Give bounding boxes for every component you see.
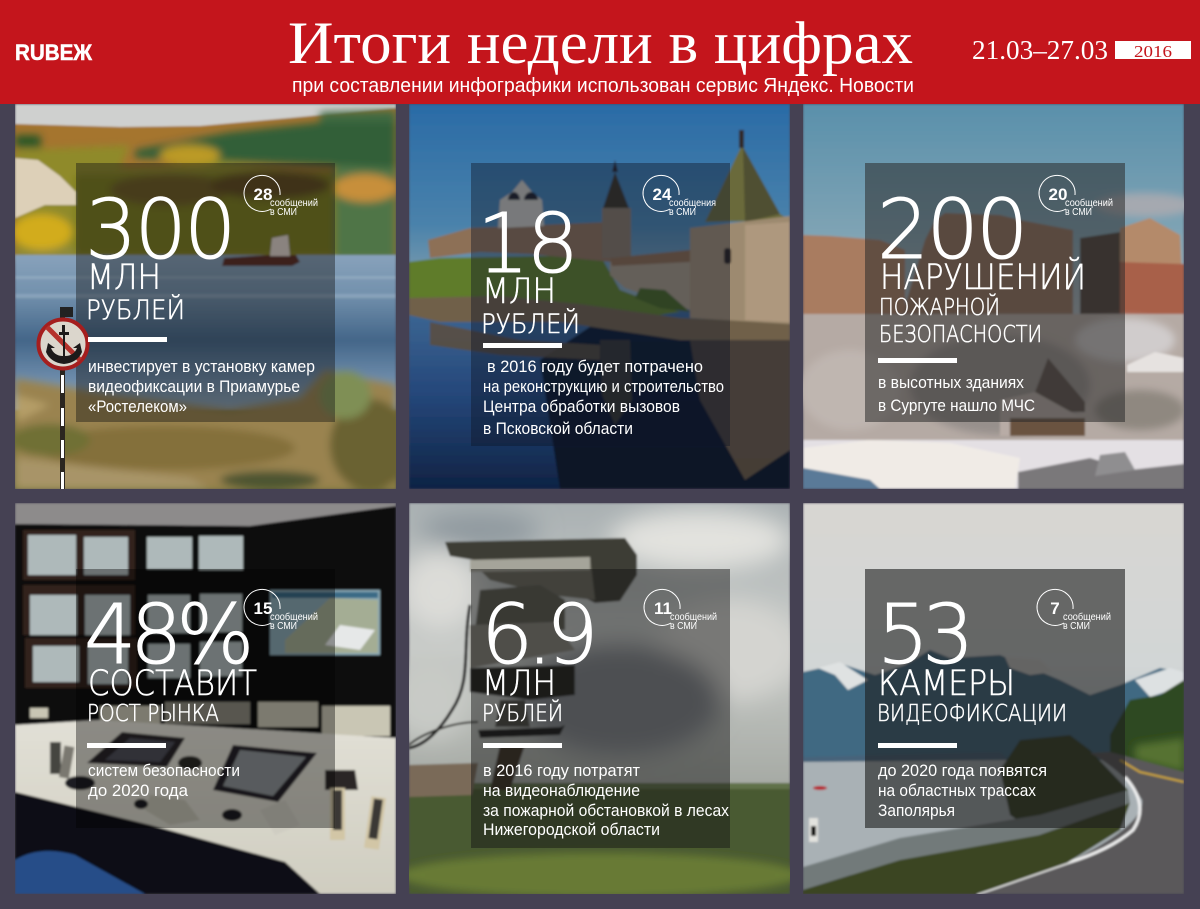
unit: МЛН — [482, 664, 556, 704]
panel: 53 камеры — [803, 503, 1184, 894]
big number: 18 — [477, 197, 576, 292]
overlay box — [471, 569, 730, 848]
subtitle: при составлении инфографики использован сервис Яндекс. Новости — [292, 75, 914, 97]
header band — [0, 0, 1200, 104]
badge: media mentions: в СМИ — [270, 620, 297, 632]
badge: media mentions — [244, 175, 318, 218]
description: инвестирует в установку камер — [88, 357, 315, 376]
badge: media mentions — [643, 175, 716, 218]
photo: CCTV control room — [15, 503, 396, 894]
description — [878, 761, 1047, 820]
subheadline: БЕЗОПАСНОСТИ — [879, 322, 1042, 348]
badge: media mentions: в СМИ — [270, 206, 297, 218]
big number: 300 — [85, 183, 234, 278]
big number: 53 — [877, 588, 967, 683]
photo: Pskov kremlin — [409, 104, 790, 489]
overlay box — [76, 163, 335, 422]
badge: media mentions: 20 — [1049, 185, 1067, 204]
badge: media mentions: сообщений — [1065, 197, 1113, 209]
description: систем безопасности — [88, 761, 240, 780]
unit: МЛН — [87, 258, 161, 298]
big number: 6.9 — [481, 588, 592, 683]
unit: МЛН — [482, 272, 556, 312]
overlay box — [76, 569, 335, 828]
overlay box — [865, 569, 1125, 828]
overlay box — [471, 163, 730, 446]
description: до 2020 года — [88, 781, 189, 800]
badge: media mentions: сообщений — [270, 611, 318, 623]
description: в 2016 году будет потрачено — [487, 357, 703, 376]
description — [88, 357, 315, 416]
panel: 48% — [15, 503, 396, 894]
badge: media mentions — [1037, 589, 1111, 632]
badge: media mentions: в СМИ — [669, 206, 696, 218]
subheadline: ВИДЕОФИКСАЦИИ — [877, 701, 1067, 727]
description: на видеонаблюдение — [483, 781, 640, 800]
description: в Сургуте нашло МЧС — [878, 396, 1035, 415]
badge: media mentions: в СМИ — [670, 620, 697, 632]
badge: media mentions: сообщений — [270, 197, 318, 209]
description: в высотных зданиях — [878, 373, 1024, 392]
description: за пожарной обстановкой в лесах — [483, 801, 729, 820]
subheadline: ПОЖАРНОЙ — [879, 293, 1000, 321]
description — [878, 373, 1035, 415]
badge: media mentions: 28 — [254, 185, 272, 204]
badge: media mentions: в СМИ — [1063, 620, 1090, 632]
icon: no-anchor sign — [38, 307, 88, 489]
unit line 2: РУБЛЕЙ — [86, 294, 185, 326]
photo: forest surveillance camera — [390, 503, 800, 897]
description: видеофиксации в Приамурье — [88, 377, 300, 396]
description — [483, 761, 729, 839]
badge: media mentions: в СМИ — [1065, 206, 1092, 218]
badge: media mentions — [244, 589, 318, 632]
description: Заполярья — [878, 801, 955, 820]
badge: media mentions: 24 — [653, 185, 672, 204]
description: на областных трассах — [878, 781, 1036, 800]
badge: media mentions — [644, 589, 717, 632]
description: в 2016 году потратят — [483, 761, 640, 780]
photo: winter Surgut high-rises — [800, 104, 1195, 489]
description — [88, 761, 240, 800]
year tag: 2016 — [1134, 42, 1172, 61]
badge: media mentions: 11 — [654, 599, 672, 618]
photo: Arctic road and mountains — [803, 503, 1184, 894]
description: на реконструкцию и строительство — [483, 377, 724, 396]
badge: media mentions: 7 — [1050, 599, 1060, 618]
panel: 18 млн рублей — [409, 104, 790, 489]
unit line 2: РУБЛЕЙ — [481, 308, 580, 340]
big number: 48% — [84, 588, 248, 683]
badge: media mentions: сообщения — [669, 197, 716, 209]
panel: 200 нарушений — [800, 104, 1195, 489]
big number: 200 — [877, 183, 1026, 278]
description — [483, 357, 724, 438]
badge: media mentions — [1039, 175, 1113, 218]
date range: 21.03–27.03 — [972, 35, 1108, 65]
photo: river with autumn forest — [10, 104, 410, 491]
headline: НАРУШЕНИЙ — [880, 256, 1086, 298]
badge: media mentions: сообщений — [1063, 611, 1111, 623]
description: Центра обработки вызовов — [483, 397, 680, 416]
description: до 2020 года появятся — [878, 761, 1047, 780]
description: в Псковской области — [483, 419, 633, 438]
description: «Ростелеком» — [88, 397, 187, 416]
overlay box — [865, 163, 1125, 422]
subheadline — [879, 293, 1042, 348]
unit line 2: РУБЛЕЙ — [482, 699, 563, 727]
logo: RUBЕЖ — [15, 40, 92, 65]
year tag — [1115, 41, 1191, 61]
title: Итоги недели в цифрах — [288, 10, 913, 76]
panel: 6.9 млн рублей — [390, 503, 800, 897]
badge: media mentions: сообщений — [670, 611, 717, 623]
panel: 300 млн рублей — [10, 104, 410, 491]
description: Нижегородской области — [483, 820, 660, 839]
subheadline: РОСТ РЫНКА — [87, 701, 219, 727]
headline: КАМЕРЫ — [878, 664, 1015, 704]
badge: media mentions: 15 — [254, 599, 272, 618]
headline: СОСТАВИТ — [88, 664, 257, 704]
